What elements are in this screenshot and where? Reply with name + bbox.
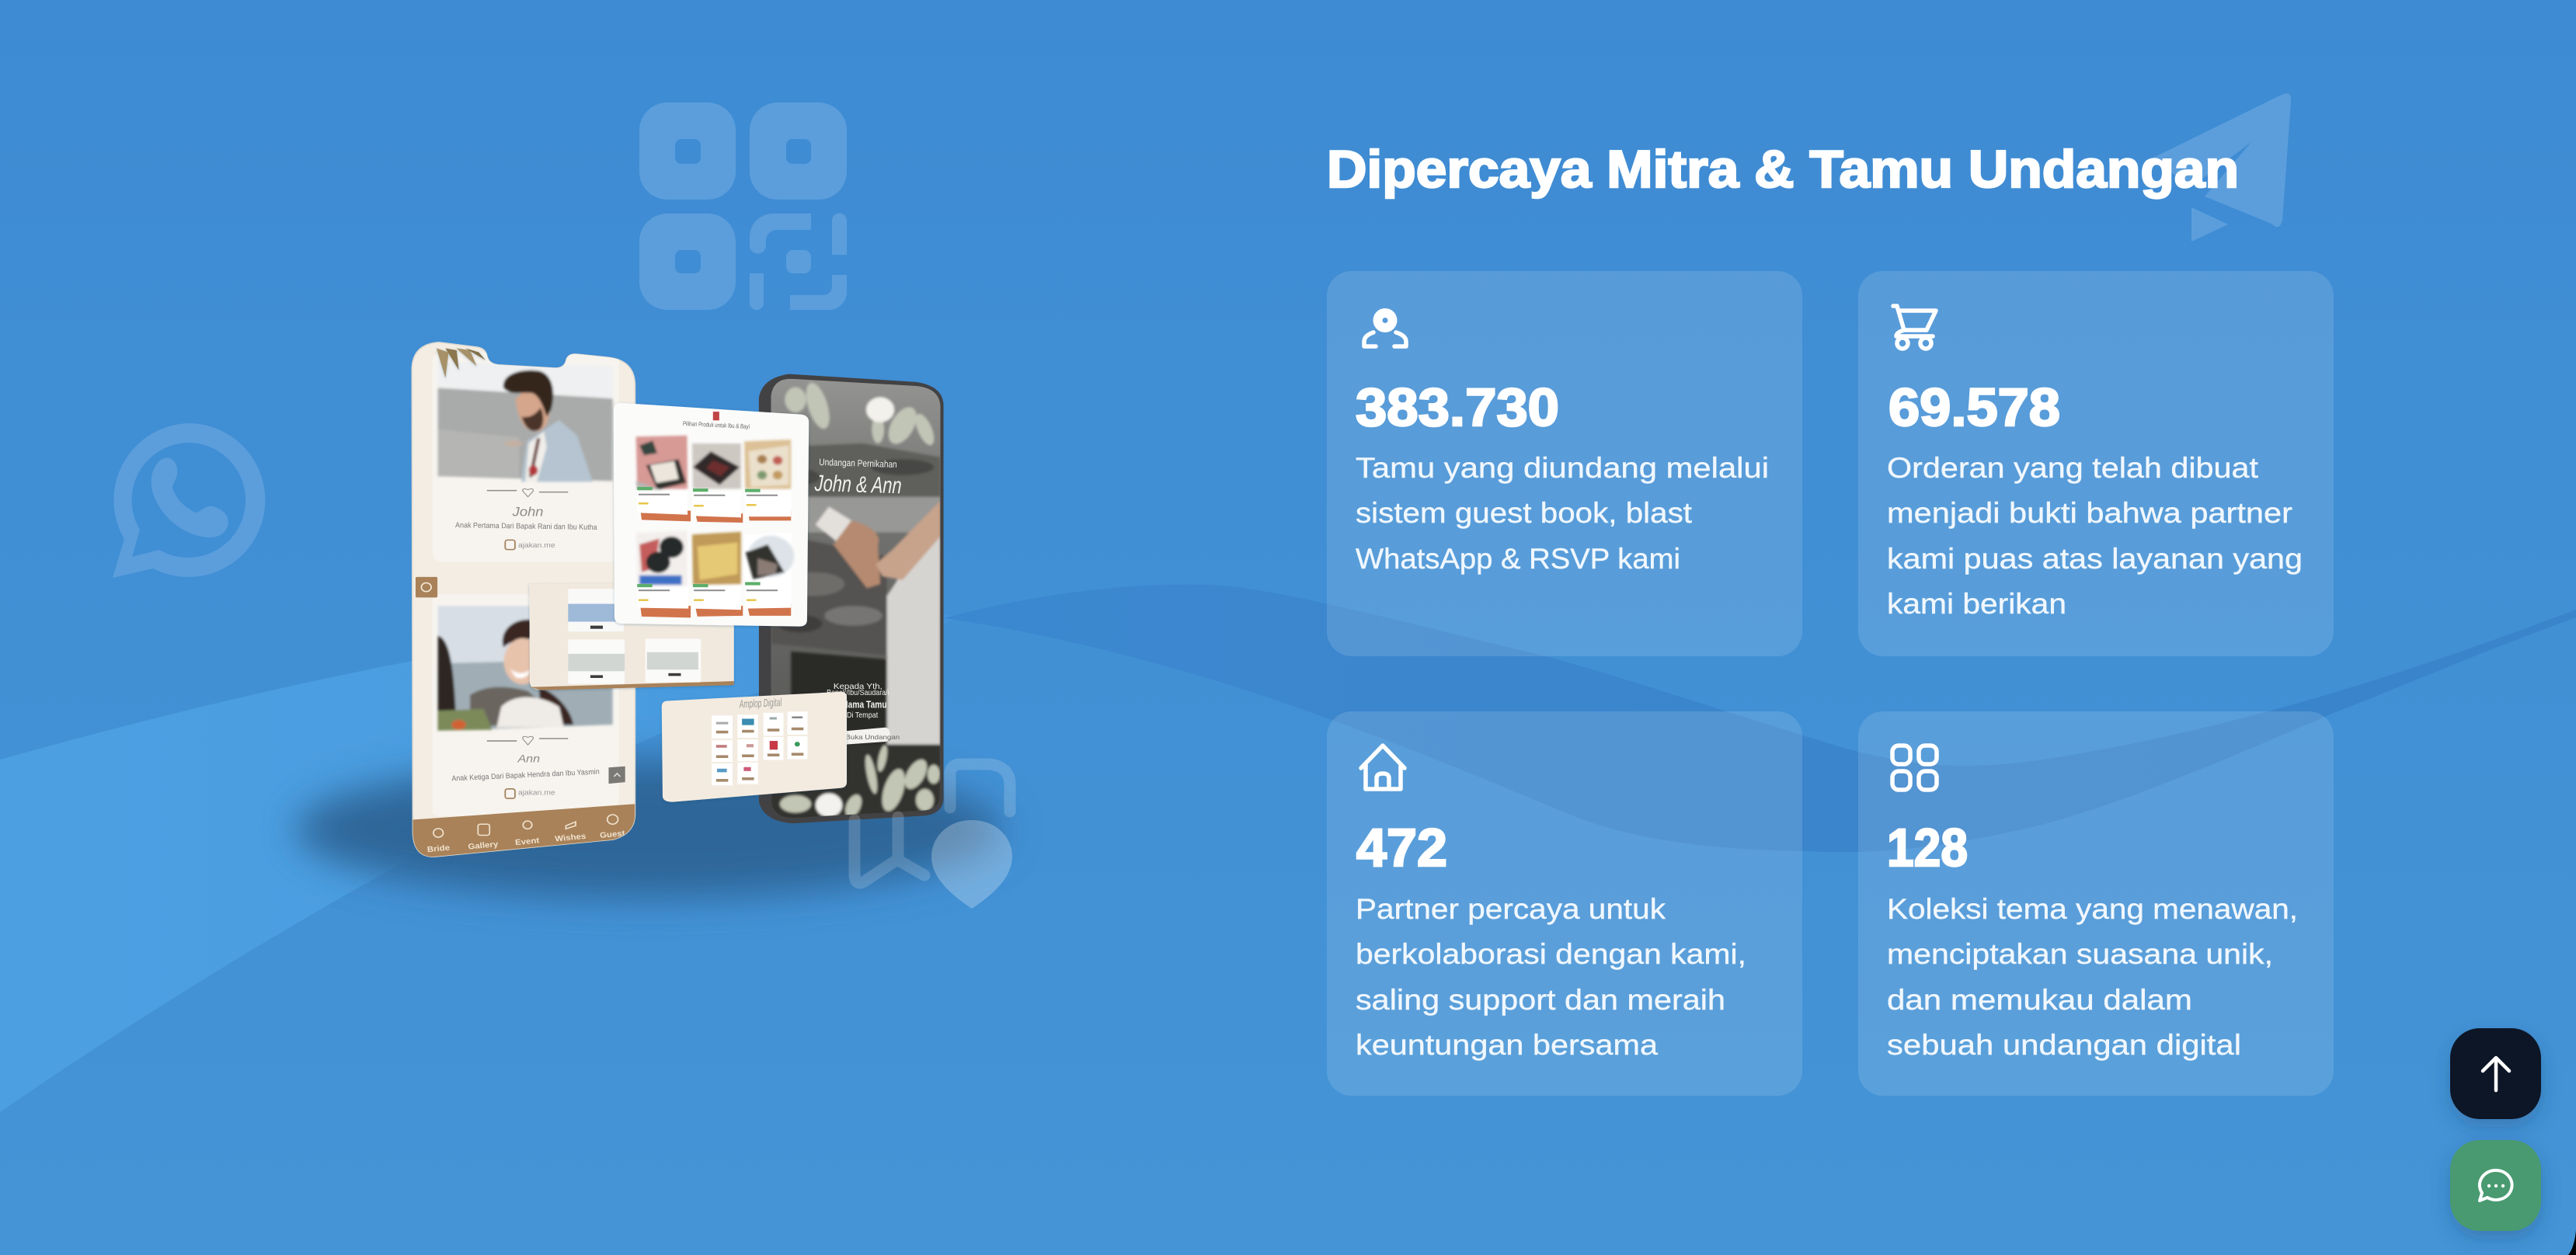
photo of groom <box>438 362 613 481</box>
description <box>1356 893 1746 1061</box>
bento <box>636 436 688 489</box>
gift title: Pilihan Produk untuk Ibu & Bayi <box>683 419 750 430</box>
dress <box>887 525 941 746</box>
description: WhatsApp & RSVP kami <box>1356 543 1680 575</box>
back to top button <box>2450 1028 2541 1119</box>
rocks <box>808 443 940 497</box>
guest label <box>827 683 889 720</box>
gift card <box>614 403 809 627</box>
icon: up arrow <box>2483 1058 2509 1090</box>
photo of bride <box>438 606 613 731</box>
digital envelope card <box>662 692 847 802</box>
envelope title: Amplop Digital <box>739 697 782 711</box>
navigation bar: Guest <box>599 829 626 840</box>
icon: grid <box>1892 746 1937 790</box>
bride instagram: ajakan.me <box>518 789 555 797</box>
groom divider <box>487 488 568 497</box>
bank tiles <box>712 711 807 785</box>
decorative icon: paper plane <box>2150 93 2291 242</box>
description: keuntungan bersama <box>1356 1029 1658 1061</box>
stat number: 69.578 <box>1888 377 2060 437</box>
left phone <box>412 342 635 861</box>
description: sebuah undangan digital <box>1887 1029 2241 1061</box>
sleeve <box>814 506 852 542</box>
invitation title: Undangan Pernikahan <box>819 457 897 470</box>
product grid <box>636 436 794 617</box>
decorative icon: bookmark and pin <box>855 764 1012 909</box>
navigation bar: Bride <box>426 843 451 854</box>
stat number: 383.730 <box>1356 377 1559 437</box>
icon: user <box>1364 308 1406 346</box>
couple names: John & Ann <box>813 470 902 499</box>
navigation bar: Event <box>514 836 540 847</box>
panel: guests stat <box>1327 271 1802 656</box>
upper bride-groom card <box>433 348 619 562</box>
decorative icon: qr code <box>639 103 847 310</box>
dark base <box>791 652 887 749</box>
heading: Dipercaya Mitra & Tamu Undangan <box>1327 140 2239 199</box>
description: kami berikan <box>1887 588 2066 620</box>
panel: partners stat <box>1327 711 1802 1096</box>
pans <box>636 530 688 586</box>
description: sistem guest book, blast <box>1356 497 1693 529</box>
description: kami puas atas layanan yang <box>1887 543 2303 575</box>
lower bride card <box>433 594 619 816</box>
guest label: Bapak/Ibu/Saudara/i <box>827 688 889 697</box>
background wave: dark band <box>944 585 2576 852</box>
open button: Buka Undangan <box>845 734 900 741</box>
groom parents: Anak Pertama Dari Bapak Rani dan Ibu Kutha <box>455 522 597 532</box>
brownies <box>692 443 741 489</box>
background wave: light wedge <box>0 610 959 1112</box>
description: Partner percaya untuk <box>1356 893 1666 925</box>
chat button <box>2450 1140 2541 1231</box>
description <box>1356 452 1769 575</box>
golden box <box>692 532 741 585</box>
groom instagram: ajakan.me <box>518 542 555 550</box>
icon: cart <box>1893 306 1936 349</box>
stat number: 128 <box>1887 818 1968 878</box>
navigation bar: Wishes <box>555 832 587 843</box>
groom instagram <box>505 540 555 550</box>
guest label: Di Tempat <box>847 711 878 720</box>
description: saling support dan meraih <box>1356 984 1725 1016</box>
icon: chat bubble <box>2480 1170 2512 1201</box>
guest label: Nama Tamu <box>842 699 887 711</box>
panel: orders stat <box>1858 271 2334 656</box>
leaf sprig <box>437 348 486 378</box>
description: Orderan yang telah dibuat <box>1887 452 2259 484</box>
scroll button <box>608 767 625 784</box>
description: Koleksi tema yang menawan, <box>1887 893 2298 925</box>
guest label: Kepada Yth, <box>834 683 882 691</box>
description <box>1887 452 2303 620</box>
location card <box>529 583 734 690</box>
navigation bar <box>412 804 635 861</box>
navigation bar: Gallery <box>468 840 499 851</box>
description: berkolaborasi dengan kami, <box>1356 938 1746 970</box>
dark box <box>748 536 794 577</box>
right phone <box>759 374 945 823</box>
mockup shadow <box>295 761 1002 898</box>
description: dan memukau dalam <box>1887 984 2192 1016</box>
stat number: 472 <box>1356 818 1447 878</box>
bride parents: Anak Ketiga Dari Bapak Hendra dan Ibu Yasmin <box>451 768 600 783</box>
description: menjadi bukti bahwa partner <box>1887 497 2292 529</box>
description: Tamu yang diundang melalui <box>1356 452 1769 484</box>
foliage top <box>785 381 938 448</box>
side toggle <box>416 577 437 597</box>
open button <box>840 728 900 745</box>
box cookies <box>744 440 791 489</box>
description <box>1887 893 2298 1061</box>
bride name: Ann <box>517 753 540 765</box>
description: menciptakan suasana unik, <box>1887 938 2273 970</box>
hands <box>834 520 880 588</box>
decorative icon: whatsapp <box>113 423 265 578</box>
panel: themes stat <box>1858 711 2334 1096</box>
bride divider <box>487 736 568 745</box>
icon: home <box>1361 746 1405 789</box>
groom name: John <box>512 504 544 519</box>
bride instagram <box>505 789 555 798</box>
foliage bottom <box>780 745 940 819</box>
window corner <box>2568 1230 2576 1255</box>
phone mockups <box>412 342 945 861</box>
